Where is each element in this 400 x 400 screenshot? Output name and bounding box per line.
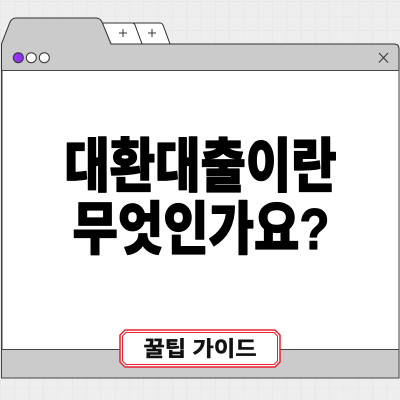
badge: tip guide: 꿀팁 가이드 [143, 337, 257, 361]
badge: tip guide [120, 330, 280, 367]
icon: close [379, 53, 388, 62]
title: 무엇인가요? [72, 199, 330, 262]
browser tab: plus two [134, 23, 170, 44]
browser tab: plus one [102, 23, 142, 44]
title [64, 135, 337, 262]
footer bar [2, 350, 399, 378]
window control dots [13, 53, 49, 63]
content panel [2, 70, 399, 350]
title: 대환대출이란 [64, 135, 337, 199]
